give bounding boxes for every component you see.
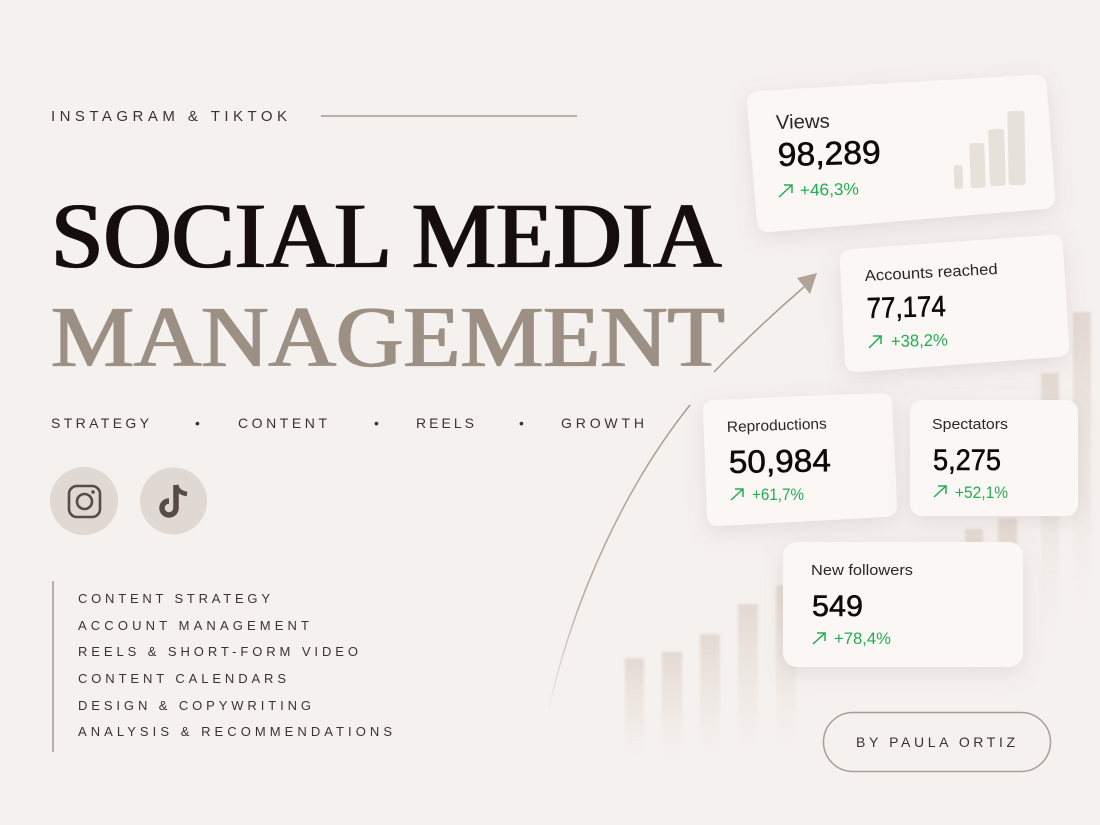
card: accounts reached [840,235,1069,372]
icon: instagram [50,467,118,535]
title [51,185,725,385]
icon: up arrow [731,489,743,500]
card: spectators: +52,1% [955,483,1008,502]
service list: CONTENT STRATEGY [78,591,270,606]
title: MANAGEMENT [51,290,725,385]
card: spectators [910,400,1078,516]
service list: ACCOUNT MANAGEMENT [78,618,309,633]
author badge: BY PAULA ORTIZ [856,734,1015,750]
card: new followers: +78,4% [834,629,891,648]
background bar chart [625,312,1091,770]
icon: up arrow [869,336,881,348]
card: accounts reached: +38,2% [891,331,948,351]
title: SOCIAL MEDIA [51,185,722,288]
card: spectators: 5,275 [933,444,1001,477]
card: reproductions: 50,984 [728,442,831,480]
services strip: • [374,415,379,431]
services strip: CONTENT [238,415,327,431]
services strip: GROWTH [561,415,644,431]
card: reproductions: +61,7% [752,485,804,504]
icon: up arrow [813,633,825,644]
icon: tiktok [140,468,207,534]
services strip: REELS [416,415,474,431]
card: views [747,75,1055,232]
service list: REELS & SHORT-FORM VIDEO [78,644,358,659]
card: new followers: New followers [811,562,913,579]
icon: up arrow [934,486,946,497]
card: reproductions: Reproductions [727,416,827,436]
arrow: growth curve [548,273,817,712]
mini bar chart [954,111,1026,189]
card: new followers: 549 [812,590,863,623]
eyebrow: platforms: INSTAGRAM & TIKTOK [51,108,287,125]
card: views: 98,289 [777,133,881,173]
card: reproductions [703,393,897,526]
icon: up arrow [779,185,792,197]
service list: DESIGN & COPYWRITING [78,698,311,713]
services strip [51,415,644,431]
service list: CONTENT CALENDARS [78,671,286,686]
author badge [824,712,1050,772]
services strip: STRATEGY [51,415,150,431]
services strip: • [195,415,200,431]
card: new followers [783,542,1023,667]
card: views: +46,3% [800,179,859,200]
service list [53,581,392,752]
card: views: Views [776,111,830,134]
services strip: • [519,415,524,431]
card: accounts reached: 77,174 [866,291,946,325]
card: accounts reached: Accounts reached [864,261,998,285]
card: spectators: Spectators [932,416,1008,433]
service list: ANALYSIS & RECOMMENDATIONS [78,724,392,739]
